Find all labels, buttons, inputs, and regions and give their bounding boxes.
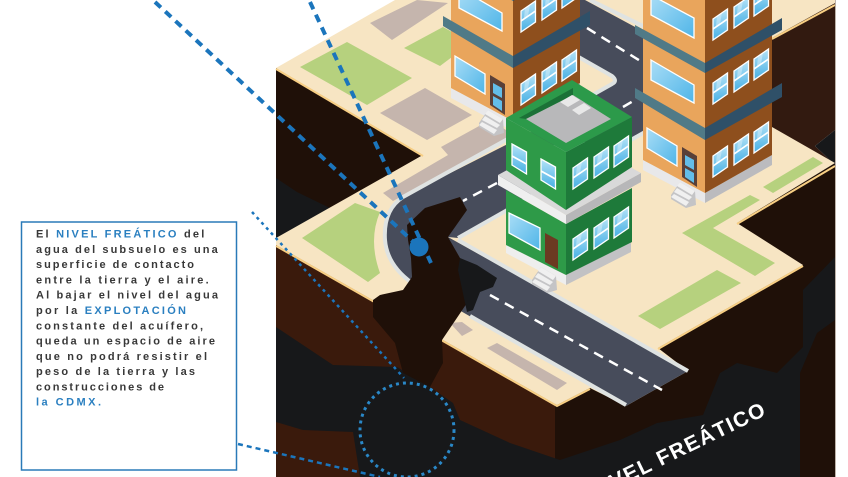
text panel: explanation: superficie de contacto bbox=[36, 259, 194, 271]
steps: right building bbox=[671, 182, 696, 208]
text panel: explanation: constante del acuífero, bbox=[36, 320, 203, 332]
soil: upper left dark wedge bbox=[276, 68, 423, 240]
ground surface bbox=[276, 0, 835, 406]
panel: isometric cutaway scene bbox=[276, 0, 836, 477]
text panel: explanation: El NIVEL FREÁTICO del bbox=[36, 228, 204, 240]
text panel: explanation: Al bajar el nivel del agua bbox=[36, 290, 219, 302]
soil: upper right brown face bbox=[770, 3, 835, 165]
road curbs bbox=[385, 0, 688, 405]
sinkhole shadow bbox=[458, 258, 497, 312]
marker: dotted circle on water table bbox=[360, 383, 454, 477]
soil: left front face bbox=[276, 240, 557, 477]
text panel: explanation: agua del subsuelo es una bbox=[36, 244, 219, 256]
groundwater band bbox=[276, 257, 835, 477]
building: orange left bbox=[443, 0, 590, 131]
text panel: explanation: peso de la tierra y las bbox=[36, 366, 195, 378]
text panel: explanation bbox=[22, 222, 236, 470]
text panel: explanation: entre la tierra y el aire. bbox=[36, 274, 209, 286]
text panel: explanation: construcciones de bbox=[36, 382, 164, 394]
right edge line bbox=[835, 0, 836, 477]
sinkhole bbox=[373, 197, 467, 387]
soil: upper left water shadow bbox=[276, 178, 330, 240]
soil: right dark face bbox=[555, 160, 835, 477]
text panel: explanation: por la EXPLOTACIÓN bbox=[36, 304, 186, 317]
text panel: explanation: que no podrá resistir el bbox=[36, 351, 207, 363]
building: green bbox=[498, 80, 641, 285]
callout lines: dashed connectors bbox=[155, 2, 431, 477]
steps: left building bbox=[479, 110, 504, 136]
steps: green building bbox=[532, 267, 557, 293]
green plots bbox=[300, 27, 823, 329]
traffic island bbox=[575, 55, 615, 105]
text panel: explanation: la CDMX. bbox=[36, 396, 101, 408]
building: orange right bbox=[635, 0, 782, 203]
road dashes bbox=[463, 28, 662, 390]
marker: blue dot on sinkhole bbox=[410, 238, 428, 256]
ground edge highlight bbox=[276, 5, 835, 406]
text panel: explanation: queda un espacio de aire bbox=[36, 336, 215, 348]
road bbox=[385, 0, 688, 406]
grey plots bbox=[370, 0, 567, 390]
